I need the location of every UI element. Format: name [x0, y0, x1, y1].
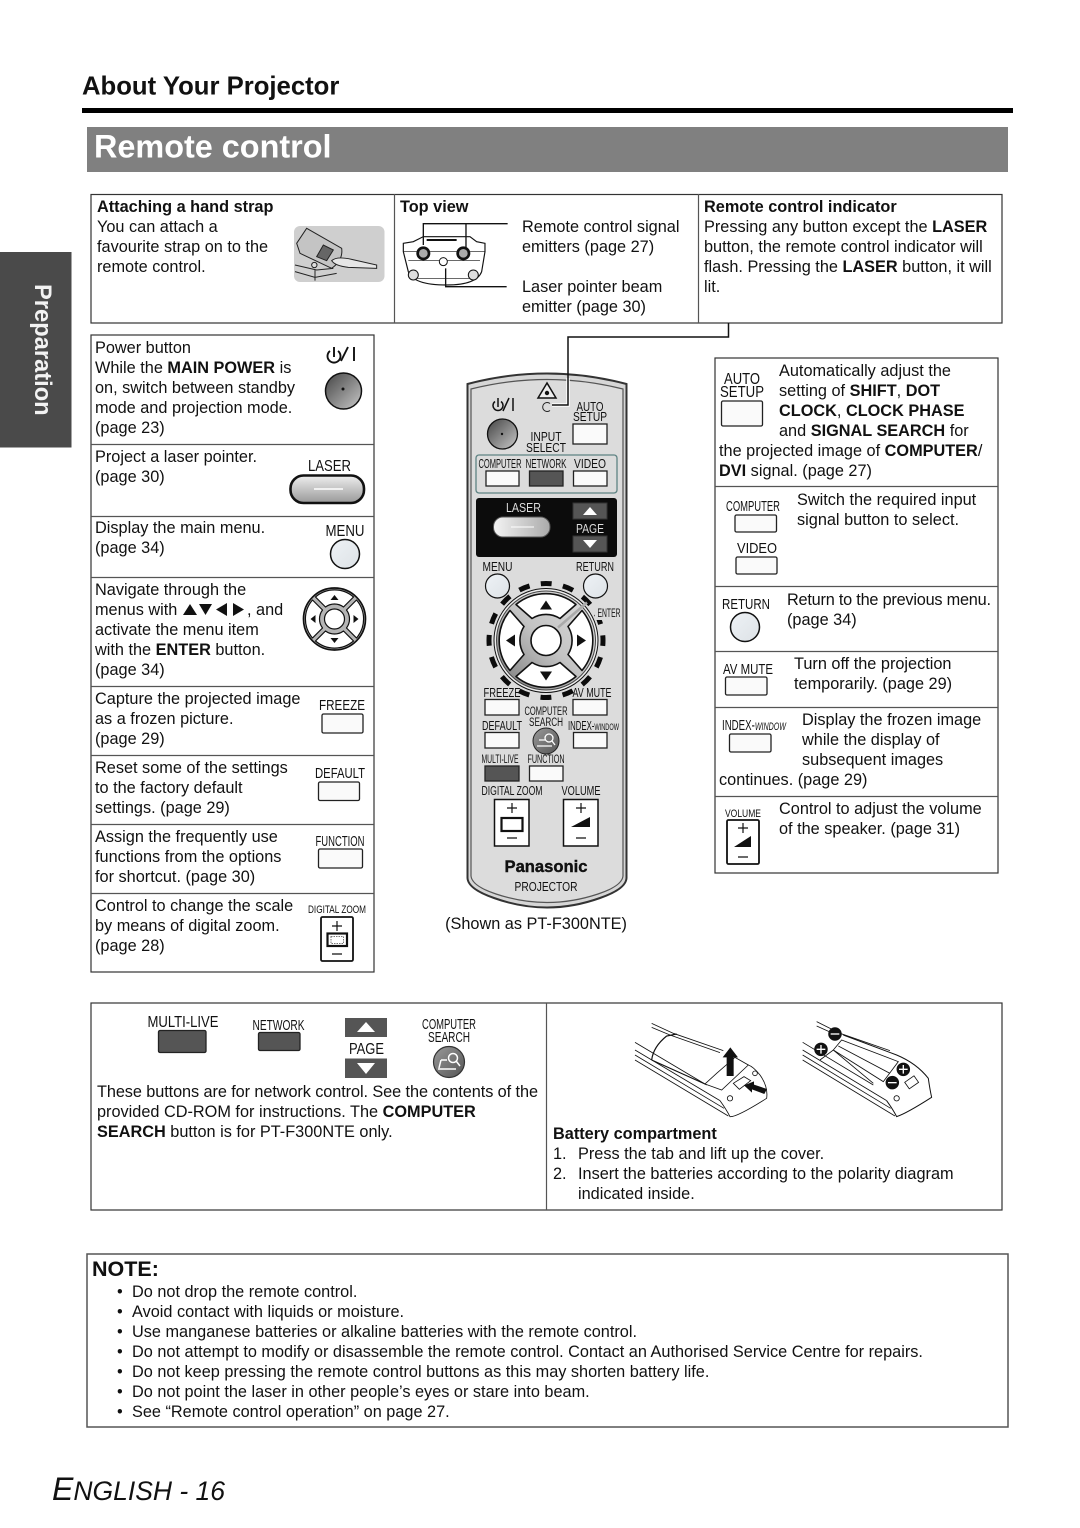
row: digital zoom: by means of digital zoom. — [95, 917, 280, 935]
brand: Panasonic projector: Panasonic — [504, 857, 588, 876]
row: laser — [95, 448, 364, 503]
row: laser: Project a laser pointer. — [95, 448, 257, 466]
menu and return buttons — [482, 560, 614, 598]
av mute and index window buttons — [568, 686, 619, 748]
note bullet list: • — [117, 1403, 123, 1421]
row: auto setup: CLOCK, CLOCK PHASE — [779, 402, 965, 420]
row: function: functions from the options — [95, 848, 281, 866]
computer search and function buttons: FUNCTION — [528, 754, 564, 766]
row: function: for shortcut. (page 30) — [95, 868, 255, 886]
row: auto setup: setting of SHIFT, DOT — [779, 382, 940, 400]
icon row: network control buttons: COMPUTER — [422, 1016, 476, 1033]
icon: index window button — [722, 717, 787, 752]
row: input select: Switch the required input — [797, 491, 977, 509]
digital zoom rocker: DIGITAL ZOOM — [482, 784, 542, 798]
text block: remote control indicator: Pressing any button except the LASER — [704, 218, 988, 236]
laser and page panel: PAGE — [576, 522, 604, 536]
text block: remote control indicator: lit. — [704, 278, 720, 296]
icon row: network control buttons — [148, 1014, 476, 1078]
note bullet list: • — [117, 1363, 123, 1381]
icon: auto setup button: SETUP — [720, 384, 764, 401]
icon: auto setup button — [720, 371, 764, 426]
icon: function button — [318, 849, 362, 868]
row: laser: (page 30) — [95, 468, 165, 486]
row: function — [95, 828, 364, 886]
text block: remote control indicator: flash. Pressing the LASER button, it will — [704, 258, 992, 276]
input select group: NETWORK — [526, 457, 567, 471]
note bullet list: See “Remote control operation” on page 27. — [132, 1403, 450, 1421]
text block: battery compartment — [553, 1125, 954, 1203]
row: navigate: , and — [247, 601, 283, 619]
row: navigate: (page 34) — [95, 661, 165, 679]
illustration: opening the battery cover — [635, 1023, 767, 1117]
row: auto setup — [719, 362, 983, 480]
note bullet list: Avoid contact with liquids or moisture. — [132, 1303, 404, 1321]
note bullet list: Do not attempt to modify or disassemble the remote control. Contact an Authorised Service Centre for repairs. — [132, 1343, 923, 1361]
text block: network control note: provided CD-ROM for instructions. The COMPUTER — [97, 1103, 476, 1121]
text block: network control note — [97, 1083, 538, 1141]
icon: menu button: MENU — [326, 523, 364, 540]
row: default: DEFAULT — [315, 765, 365, 782]
panel: left button descriptions — [91, 335, 374, 972]
volume rocker — [562, 784, 600, 846]
auto setup button — [573, 400, 607, 444]
row: digital zoom: Control to change the scale — [95, 897, 293, 915]
icon: digital zoom rocker — [308, 904, 366, 961]
icon: remote top view with callout lines — [403, 224, 508, 287]
row: navigate: menus with — [95, 601, 177, 619]
remote body — [468, 374, 626, 908]
text block: network control note: These buttons are for network control. See the contents of the — [97, 1083, 538, 1101]
input select label: INPUT — [530, 430, 562, 444]
text block: attaching a hand strap: Attaching a hand strap — [97, 198, 273, 216]
icon: auto setup button: AUTO — [724, 371, 760, 388]
icon: computer and video buttons: COMPUTER — [726, 498, 780, 515]
row: auto setup: DVI signal. (page 27) — [719, 462, 872, 480]
row: navigate — [94, 581, 366, 679]
freeze, default and multi-live buttons: DEFAULT — [482, 719, 522, 733]
row: freeze: FREEZE — [319, 697, 365, 714]
text block: attaching a hand strap: remote control. — [97, 258, 206, 276]
section heading: About Your Projector: About Your Projector — [82, 72, 339, 100]
text block: battery compartment: Insert the batteries according to the polarity diagram — [578, 1165, 954, 1183]
panel: note — [87, 1254, 1008, 1427]
icon: computer and video buttons — [726, 498, 780, 574]
av mute and index window buttons: INDEX-WINDOW — [568, 719, 619, 733]
panel: top information table — [91, 194, 1002, 323]
icon: laser button — [290, 458, 364, 503]
row: input select: signal button to select. — [797, 511, 959, 529]
input select group: VIDEO — [574, 457, 606, 471]
row: volume: of the speaker. (page 31) — [779, 820, 960, 838]
row: freeze: as a frozen picture. — [95, 710, 233, 728]
row: return: (page 34) — [787, 611, 857, 629]
input select group — [476, 455, 617, 493]
row: index window: Display the frozen image — [802, 711, 981, 729]
row: menu — [95, 519, 364, 568]
text block: remote control signal and laser emitters — [522, 218, 679, 316]
row: function: Assign the frequently use — [95, 828, 278, 846]
row: power button: mode and projection mode. — [95, 399, 292, 417]
text block: battery compartment: Battery compartment — [553, 1125, 717, 1143]
av mute and index window buttons: AV MUTE — [572, 686, 612, 700]
row: menu: (page 34) — [95, 539, 165, 557]
input select label: SELECT — [526, 441, 566, 455]
illustration: inserting the batteries with polarity marks — [803, 1022, 932, 1117]
title band: Remote control: Remote control — [94, 128, 332, 164]
brand: Panasonic projector — [504, 857, 588, 894]
icon: return button: RETURN — [722, 596, 770, 613]
callout halo inside remote — [552, 378, 568, 405]
text block: remote control indicator — [704, 198, 992, 296]
icon: direction pad — [304, 588, 366, 650]
icon: power symbol and button — [326, 347, 362, 409]
icon: laser warning triangle — [538, 383, 556, 398]
indicator sensor — [543, 402, 550, 412]
row: navigate: with the ENTER button. — [94, 641, 265, 659]
row: index window: while the display of — [801, 731, 940, 749]
row: index window: continues. (page 29) — [719, 771, 867, 789]
menu and return buttons: RETURN — [576, 560, 614, 574]
row: digital zoom — [95, 897, 366, 961]
row: volume: Control to adjust the volume — [779, 800, 982, 818]
text block: battery compartment: 1. — [553, 1145, 567, 1163]
row: return: Return to the previous menu. — [787, 591, 991, 609]
enter label — [595, 607, 621, 620]
text block: attaching a hand strap: You can attach a — [97, 218, 219, 236]
row: digital zoom: (page 28) — [95, 937, 165, 955]
computer search and function buttons: SEARCH — [529, 717, 563, 729]
volume rocker: VOLUME — [562, 784, 600, 798]
input select label — [526, 430, 566, 455]
icon: av mute button: AV MUTE — [723, 661, 773, 678]
icon: volume rocker — [725, 808, 761, 864]
row: default: Reset some of the settings — [95, 759, 288, 777]
icon: av mute button — [723, 661, 773, 695]
text block: remote control indicator: Remote control indicator — [704, 198, 897, 216]
text block: remote control signal and laser emitters: Remote control signal — [522, 218, 679, 236]
row: power button: on, switch between standby — [95, 379, 296, 397]
enter label: ENTER — [598, 608, 620, 620]
freeze, default and multi-live buttons: MULTI-LIVE — [482, 754, 519, 766]
row: power button: Power button — [95, 339, 191, 357]
input select group: COMPUTER — [478, 457, 522, 471]
note bullet list: Do not drop the remote control. — [132, 1283, 357, 1301]
heading rule — [82, 108, 1013, 113]
row: default — [95, 759, 365, 817]
row: auto setup: Automatically adjust the — [779, 362, 951, 380]
row: index window — [719, 711, 981, 789]
laser and page panel: LASER — [506, 501, 541, 515]
row: return — [722, 591, 991, 642]
row: function: FUNCTION — [316, 833, 364, 850]
row: index window: subsequent images — [802, 751, 943, 769]
row: power button: (page 23) — [95, 419, 165, 437]
direction pad with enter — [489, 584, 603, 698]
panel: network buttons and battery compartment — [91, 1003, 1002, 1210]
text block: attaching a hand strap — [97, 198, 273, 276]
note bullet list: • — [117, 1303, 123, 1321]
row: freeze: Capture the projected image — [95, 690, 300, 708]
laser and page panel — [476, 498, 617, 557]
row: menu: Display the main menu. — [95, 519, 265, 537]
icon row: network control buttons: NETWORK — [252, 1017, 304, 1034]
icon: digital zoom rocker: DIGITAL ZOOM — [308, 904, 366, 916]
note bullet list — [117, 1283, 923, 1421]
note bullet list: • — [117, 1323, 123, 1341]
row: navigate: activate the menu item — [95, 621, 259, 639]
brand: Panasonic projector: PROJECTOR — [514, 880, 578, 894]
text block: battery compartment: indicated inside. — [578, 1185, 695, 1203]
icon row: network control buttons: MULTI-LIVE — [148, 1014, 218, 1031]
text block: network control note: SEARCH button is for PT-F300NTE only. — [97, 1123, 393, 1141]
note heading: NOTE: — [92, 1257, 159, 1281]
icon row: network control buttons: PAGE — [349, 1041, 384, 1058]
text block: attaching a hand strap: favourite strap on to the — [97, 238, 268, 256]
row: volume — [725, 800, 982, 864]
text block: remote control indicator: button, the remote control indicator will — [704, 238, 983, 256]
note bullet list: Do not point the laser in other people’s eyes or stare into beam. — [132, 1383, 590, 1401]
row: power button — [95, 339, 362, 437]
icon: computer and video buttons: VIDEO — [737, 540, 777, 557]
illustration: remote control — [468, 374, 626, 908]
title band: Remote control — [87, 127, 1008, 172]
caption: shown as model: (Shown as PT-F300NTE) — [445, 915, 627, 933]
row: default: settings. (page 29) — [95, 799, 230, 817]
text block: remote control signal and laser emitters: emitters (page 27) — [522, 238, 654, 256]
auto setup button: AUTO — [576, 400, 604, 414]
row: input select — [726, 491, 977, 574]
note bullet list: Use manganese batteries or alkaline batteries with the remote control. — [132, 1323, 637, 1341]
row: av mute: Turn off the projection — [794, 655, 951, 673]
panel: right button descriptions — [715, 358, 998, 873]
row: auto setup: the projected image of COMPUTER/ — [719, 442, 983, 460]
row: av mute — [723, 655, 952, 695]
freeze, default and multi-live buttons: FREEZE — [484, 686, 520, 700]
side tab: Preparation — [0, 252, 72, 448]
icon: default button — [318, 782, 360, 800]
text block: remote control signal and laser emitters: emitter (page 30) — [522, 298, 646, 316]
icon row: network control buttons: SEARCH — [428, 1029, 470, 1046]
icon: index window button: INDEX-WINDOW — [722, 717, 787, 734]
icon: hand strap illustration — [294, 226, 384, 282]
row: default: to the factory default — [95, 779, 243, 797]
power button — [488, 419, 518, 449]
row: auto setup: and SIGNAL SEARCH for — [779, 422, 969, 440]
row: freeze — [95, 690, 365, 748]
icon: power symbol — [493, 398, 513, 411]
row: freeze: (page 29) — [95, 730, 165, 748]
freeze, default and multi-live buttons — [482, 686, 522, 781]
menu and return buttons: MENU — [482, 560, 512, 574]
side tab: Preparation: Preparation — [29, 284, 55, 416]
icon: arrow glyphs — [183, 603, 244, 616]
icon: freeze button — [322, 714, 363, 733]
row: power button: While the MAIN POWER is — [95, 359, 291, 377]
computer search and function buttons — [524, 706, 568, 781]
digital zoom rocker — [482, 784, 542, 846]
note bullet list: • — [117, 1383, 123, 1401]
icon: menu button — [326, 523, 364, 568]
page number: English - 16: ENGLISH - 16 — [52, 1471, 225, 1507]
callout line: remote control indicator — [552, 323, 728, 405]
row: av mute: temporarily. (page 29) — [794, 675, 952, 693]
text block: top view heading: Top view — [400, 198, 469, 216]
text block: battery compartment: Press the tab and lift up the cover. — [578, 1145, 824, 1163]
row: navigate: Navigate through the — [95, 581, 246, 599]
icon: return button — [722, 596, 770, 642]
note bullet list: • — [117, 1343, 123, 1361]
note bullet list: Do not keep pressing the remote control buttons as this may shorten battery life. — [132, 1363, 709, 1381]
icon: volume rocker: VOLUME — [725, 808, 761, 820]
icon: laser button: LASER — [308, 458, 351, 475]
text block: battery compartment: 2. — [553, 1165, 567, 1183]
note bullet list: • — [117, 1283, 123, 1301]
auto setup button: SETUP — [573, 410, 607, 424]
text block: remote control signal and laser emitters: Laser pointer beam — [522, 278, 662, 296]
computer search and function buttons: COMPUTER — [524, 706, 568, 718]
